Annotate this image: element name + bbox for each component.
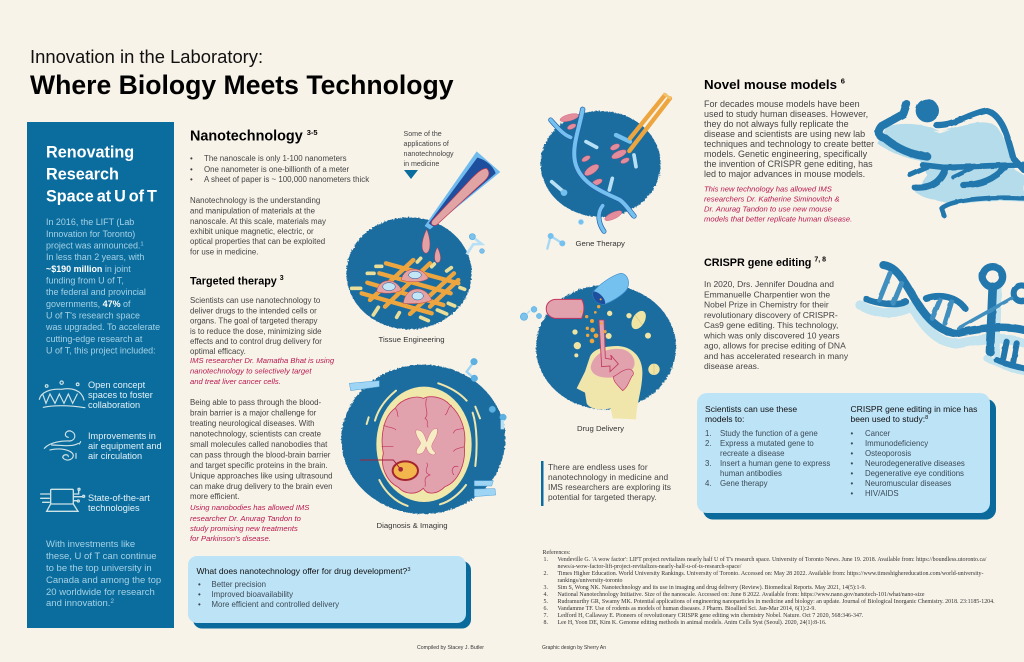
references: References: — [542, 549, 571, 556]
column: models: recreate a disease — [720, 449, 785, 458]
nanotechnology bullets: One nanometer is one-billionth of a meter — [204, 165, 350, 174]
label: air equipment: air equipment and — [88, 441, 162, 451]
column: models: 2. — [705, 439, 712, 448]
brain — [382, 397, 465, 493]
panel intro text: In less than 2 years, with — [46, 252, 144, 262]
label: air equipment: Improvements in — [88, 431, 156, 441]
references: 3. — [544, 585, 548, 591]
column: models: 4. — [705, 479, 712, 488]
researcher note: mouse: Dr. Anurag Tandon to use new mouse — [704, 204, 832, 214]
references: 8. — [544, 620, 548, 626]
column: models: Insert a human gene to express — [720, 459, 830, 468]
illustration: tissue engineering — [346, 151, 530, 329]
heading: nanotechnology: Nanotechnology — [190, 128, 303, 144]
panel closing text: these, U of T can continue — [46, 551, 157, 562]
nanotechnology description: exhibit unique magnetic, electric, or — [190, 227, 314, 236]
blood-brain barrier text: small molecules called nanobodies that — [190, 440, 328, 449]
label: open concept: Open concept — [88, 380, 146, 390]
references: Times Higher Education. World University Rankings. University of Toronto. Accessed on: May 28 2022. Available from: https://www.timeshighereducation.com/world-university- — [558, 570, 983, 577]
applications note — [404, 130, 454, 179]
label: technologies — [88, 493, 150, 513]
panel closing text: Canada and among the top — [46, 575, 161, 586]
column: crispr studies: • — [850, 479, 854, 488]
panel intro text: funding from U of T, — [46, 276, 124, 286]
column: crispr studies: Degenerative eye conditions — [865, 469, 964, 478]
label: air equipment — [88, 431, 162, 461]
panel closing text: 20 worldwide for research — [46, 587, 155, 598]
researcher note: mouse — [704, 184, 852, 224]
icon: air circulation — [44, 431, 81, 460]
heading: crispr gene editing: CRISPR gene editing — [704, 257, 811, 269]
researcher note: Bhat — [190, 356, 335, 386]
researcher note: Tandon: study promising new treatments — [190, 524, 298, 533]
molecules — [531, 306, 537, 312]
credit: graphic design: Graphic design by Sherry An — [542, 645, 606, 651]
blood-brain barrier text: Unique approaches like using ultrasound — [190, 472, 333, 480]
illustration: gene therapy — [541, 94, 670, 249]
callout box: drug development: • — [198, 590, 201, 599]
targeted therapy text: effects and to control drug delivery for — [190, 337, 322, 346]
column: crispr studies: • — [850, 469, 854, 478]
molecules — [467, 358, 506, 429]
cells — [377, 269, 432, 304]
references: 2. — [544, 571, 548, 577]
crispr text: Nobel Prize in Chemistry for their — [704, 300, 829, 310]
nanotechnology description: nanoscale. At this scale, materials may — [190, 217, 326, 226]
references: rankings/university-toronto — [558, 578, 623, 584]
blood-brain barrier text: can pass through the blood-brain barrier — [190, 450, 331, 460]
callout box: drug development: • — [198, 580, 201, 589]
researcher note: Tandon: for Parkinson's disease. — [190, 534, 271, 543]
targeted therapy text: deliver drugs to the intended cells or — [190, 306, 317, 316]
credit: compiled by: Compiled by Stacey J. Butler — [417, 645, 484, 651]
base pairs — [559, 112, 630, 223]
targeted therapy text: organs. The goal of targeted therapy — [190, 316, 318, 326]
drops — [422, 229, 430, 253]
column: models: 3. — [705, 459, 712, 468]
column: crispr studies: HIV/AIDS — [865, 489, 899, 498]
label: open concept — [88, 380, 153, 410]
panel heading — [46, 144, 157, 206]
column: crispr studies: Osteoporosis — [865, 449, 911, 458]
heading: novel mouse models: 6 — [841, 76, 845, 86]
column: crispr studies: • — [850, 439, 854, 448]
crispr text: ago, allows for precise editing of DNA — [704, 340, 846, 350]
mouse models text: techniques and technology to create better — [704, 139, 874, 149]
head — [577, 346, 642, 419]
blood-brain barrier text: more efficient. — [190, 492, 239, 501]
column: models — [705, 404, 830, 488]
title: Innovation in the Laboratory: — [30, 46, 263, 67]
nanotechnology bullets: • — [190, 165, 193, 174]
crispr text — [703, 279, 849, 371]
nanotechnology bullets — [190, 154, 369, 184]
references: Lee H, Yoon DE, Kim K. Genome editing methods in animal models. Anim Cells Syst (Seoul). 2020, 24(1):8-16. — [558, 619, 827, 626]
particles — [580, 298, 607, 343]
blood-brain barrier text: treating neurological diseases. With — [190, 419, 315, 428]
panel heading: Renovating — [46, 144, 134, 162]
column: crispr studies: • — [850, 459, 854, 468]
mouse models text: led to major advances in mouse models. — [704, 169, 865, 179]
crispr text: revolutionary discovery of CRISPR- — [704, 310, 838, 320]
crispr text: In 2020, Drs. Jennifer Doudna and — [704, 279, 834, 289]
column: models: human antibodies — [720, 469, 782, 478]
panel intro text: Innovation for Toronto) — [46, 229, 135, 239]
researcher note: Bhat: and treat liver cancer cells. — [190, 377, 281, 386]
researcher note: Bhat: IMS researcher Dr. Mamatha Bhat is using — [190, 356, 335, 365]
nanotechnology description: for use in medicine. — [190, 248, 258, 256]
caption: gene therapy: Gene Therapy — [576, 239, 625, 248]
researcher note: mouse: researchers Dr. Katherine Siminovitch & — [704, 194, 840, 204]
column: crispr studies: • — [850, 489, 854, 498]
column: crispr studies: • — [850, 449, 854, 458]
references: Rudramurthy GR, Swamy MK. Potential applications of engineering nanoparticles in medicine and biology: an update. Journal of Biological Inorganic Chemistry. 2018. 23:1185-1204. — [558, 598, 995, 605]
nanotechnology bullets: • — [190, 175, 193, 184]
references: 6. — [544, 606, 548, 612]
heading: targeted therapy: 3 — [280, 275, 284, 282]
panel closing text: to be the top university in — [46, 563, 152, 574]
callout box: drug development: Better precision — [212, 580, 266, 589]
blood-brain barrier text: and target specific proteins in the brain. — [190, 461, 328, 470]
brain ventricles — [416, 429, 437, 455]
crispr text: disease areas. — [704, 361, 759, 371]
references: 7. — [544, 613, 548, 619]
mouse models text: the invention of CRISPR gene editing, has — [704, 159, 873, 169]
caption: diagnosis and imaging: Diagnosis & Imaging — [376, 521, 448, 530]
panel closing text: With investments like — [46, 539, 135, 550]
callout box: drug development: 3 — [407, 567, 410, 573]
panel intro text: cutting-edge research at — [46, 334, 143, 344]
column: crispr studies: Neuromuscular diseases — [865, 479, 951, 488]
references: 5. — [544, 599, 548, 605]
column: crispr studies: Immunodeficiency — [865, 439, 928, 448]
references — [542, 549, 995, 626]
callout: endless uses: potential for targeted therapy. — [548, 492, 657, 502]
panel closing text: and innovation. — [46, 598, 110, 609]
researcher note: mouse: This new technology has allowed IMS — [704, 184, 833, 194]
panel intro text: ~$190 million in joint — [46, 264, 131, 274]
targeted therapy text — [190, 296, 322, 356]
arrow — [599, 320, 618, 372]
panel intro text — [45, 217, 160, 356]
panel intro text: the federal and provincial — [46, 287, 146, 297]
references: 1. — [544, 557, 548, 563]
column: crispr studies: Cancer — [865, 429, 891, 438]
pills — [349, 381, 496, 497]
molecule — [547, 236, 562, 249]
references: Vendeville G. 'A wow factor': LIFT project revitalizes nearly half U of T's research space. University of Toronto News. June 19. 2018. Available from: https://boundless.utoronto.ca/ — [558, 556, 987, 563]
caption: drug delivery: Drug Delivery — [577, 424, 624, 433]
targeted therapy text: Scientists can use nanotechnology to — [190, 296, 321, 305]
label: technologies: technologies — [88, 503, 140, 513]
heading: targeted therapy: Targeted therapy — [190, 276, 277, 288]
column: crispr studies — [850, 404, 977, 498]
brain — [591, 349, 635, 378]
heading: crispr gene editing: 7, 8 — [814, 256, 826, 264]
nanotechnology description — [190, 196, 326, 256]
title: Where Biology Meets Technology — [30, 70, 454, 100]
crispr text: and has accelerated research in many — [704, 351, 849, 361]
researcher note: Tandon — [190, 503, 310, 543]
panel intro text: U of T's research space — [46, 310, 140, 320]
applications note: in medicine — [404, 160, 439, 168]
tweezers — [629, 94, 670, 151]
mouse models text — [704, 99, 874, 179]
column: crispr studies: • — [850, 429, 854, 438]
panel heading: Space at U of T — [46, 188, 157, 206]
callout: endless uses: There are endless uses for — [548, 462, 648, 472]
blood-brain barrier text: Being able to pass through the blood- — [190, 398, 322, 407]
blood-brain barrier text: can make drug delivery to the brain even — [190, 482, 333, 491]
crispr text: which was only discovered 10 years — [703, 330, 840, 340]
nanotechnology description: optical properties that can be exploited — [190, 237, 325, 246]
mouse models text: disease and scientists are using new lab — [704, 129, 865, 139]
label: open concept: collaboration — [88, 400, 140, 410]
references: 4. — [544, 592, 548, 598]
blood-brain barrier text — [190, 398, 333, 501]
label: air equipment: air circulation — [88, 451, 142, 461]
illustration: drug delivery — [531, 273, 676, 419]
panel intro text: U of T, this project included: — [46, 346, 156, 356]
applications note: nanotechnology — [404, 150, 454, 158]
molecule — [467, 234, 530, 320]
targeted therapy text: is to reduce the dose, minimizing side — [190, 327, 322, 336]
targeted therapy text: optimal efficacy. — [190, 347, 246, 356]
nanotechnology description: and manipulation of materials at the — [190, 206, 316, 216]
column: models: Scientists can use these — [705, 404, 797, 414]
pipette — [425, 151, 500, 229]
panel closing text — [46, 539, 161, 609]
column: models: Study the function of a gene — [720, 429, 818, 438]
heading: nanotechnology: 3-5 — [307, 128, 318, 137]
nanotechnology bullets: A sheet of paper is ~ 100,000 nanometers thick — [204, 175, 369, 184]
applications note: Some of the — [404, 130, 442, 138]
nanotechnology bullets: • — [190, 154, 193, 163]
column: models: Gene therapy — [720, 479, 768, 488]
panel intro text: governments, 47% of — [46, 299, 131, 309]
panel intro text: was upgraded. To accelerate — [45, 322, 160, 332]
blood-brain barrier text: nanotechnology, scientists can create — [190, 430, 322, 438]
callout box: mouse models and crispr — [697, 393, 996, 520]
column: crispr studies: CRISPR gene editing in mice has — [850, 404, 977, 414]
callout box: drug development — [188, 556, 471, 628]
nanotechnology bullets: The nanoscale is only 1-100 nanometers — [204, 154, 347, 163]
dna strand — [551, 109, 636, 231]
callout: endless uses: IMS researchers are exploring its — [548, 482, 671, 492]
illustration: diagnosis and imaging — [341, 358, 506, 514]
tumour — [393, 461, 418, 480]
panel closing text: 2 — [110, 598, 114, 605]
researcher note: mouse: models that better replicate human disease. — [704, 214, 852, 224]
icon: collaboration people — [39, 381, 85, 408]
panel heading: Research — [46, 166, 119, 184]
mouse models text: used to study human diseases. However, — [704, 109, 868, 119]
scaffold — [362, 260, 458, 314]
panel intro text: In 2016, the LIFT (Lab — [46, 217, 134, 227]
references: Ledford H, Callaway E. Pioneers of revolutionary CRISPR gene editing win chemistry Nobel. Nature. Oct 7 2020, 568:346-347. — [558, 612, 864, 619]
column: models: models to: — [705, 414, 744, 424]
label: open concept: spaces to foster — [88, 390, 153, 400]
references: news/a-wow-factor-lift-project-revitalizes-nearly-half-u-of-ts-research-space/ — [558, 563, 742, 570]
references: Vandamme TF. Use of rodents as models of human diseases. J Pharm. Bioallied Sci. Jan-Mar 2014, 6(1):2-9. — [558, 605, 816, 612]
callout box: drug development: What does nanotechnology offer for drug development? — [196, 566, 407, 576]
panel intro text: project was announced. — [46, 240, 140, 250]
references: National Nanotechnology Initiative. Size of the nanoscale. Accessed on: June 8 2022. Available from: https://www.nano.gov/nanotech-101/what/nano-size — [558, 591, 925, 598]
researcher note: Tandon: Using nanobodies has allowed IMS — [190, 503, 310, 512]
column: crispr studies: 8 — [925, 415, 928, 421]
references: Sim S, Wong NK. Nanotechnology and its use in imaging and drug delivery (Review). Biomedical Reports. May 2021, 14(5):1-9. — [558, 584, 866, 591]
researcher note: Tandon: researcher Dr. Anurag Tandon to — [190, 514, 301, 523]
panel intro text: 1 — [140, 242, 144, 248]
column: models: Express a mutated gene to — [720, 439, 814, 448]
mouse models text: For decades mouse models have been — [704, 99, 860, 109]
heading: novel mouse models: Novel mouse models — [704, 77, 837, 92]
callout: endless uses: nanotechnology in medicine and — [548, 472, 668, 482]
nanotechnology description: Nanotechnology is the understanding — [190, 196, 320, 205]
caption: tissue engineering: Tissue Engineering — [378, 335, 445, 344]
icon: laptop — [41, 488, 85, 511]
mouse models text: they do not always fully replicate the — [704, 119, 849, 129]
illustration: mouse — [877, 99, 1024, 216]
column: crispr studies: Neurodegenerative diseases — [865, 459, 965, 468]
column: models: 1. — [705, 429, 712, 438]
callout: endless uses — [541, 461, 671, 506]
column: crispr studies: been used to study: — [850, 414, 925, 424]
illustration: dna and scissors — [860, 265, 1024, 372]
callout box: drug development: More efficient and controlled delivery — [212, 600, 339, 609]
mouse models text: models. Genetic engineering, specifically — [704, 149, 868, 159]
bone ticks — [367, 383, 480, 506]
capsules — [546, 299, 584, 318]
scaffold pills — [352, 258, 465, 321]
label: technologies: State-of-the-art — [88, 493, 150, 503]
title — [30, 46, 454, 100]
crispr text: Emmanuelle Charpentier won the — [704, 290, 830, 300]
blood-brain barrier text: brain barrier is a major challenge for — [190, 408, 317, 418]
callout box: drug development: Improved bioavailability — [212, 590, 293, 599]
crispr text: Cas9 gene editing. This technology, — [704, 320, 838, 330]
callout box: drug development: • — [198, 600, 201, 609]
applications note: applications of — [404, 140, 449, 148]
panel: renovating research space — [27, 122, 174, 628]
researcher note: Bhat: nanotechnology to selectively target — [190, 366, 312, 376]
